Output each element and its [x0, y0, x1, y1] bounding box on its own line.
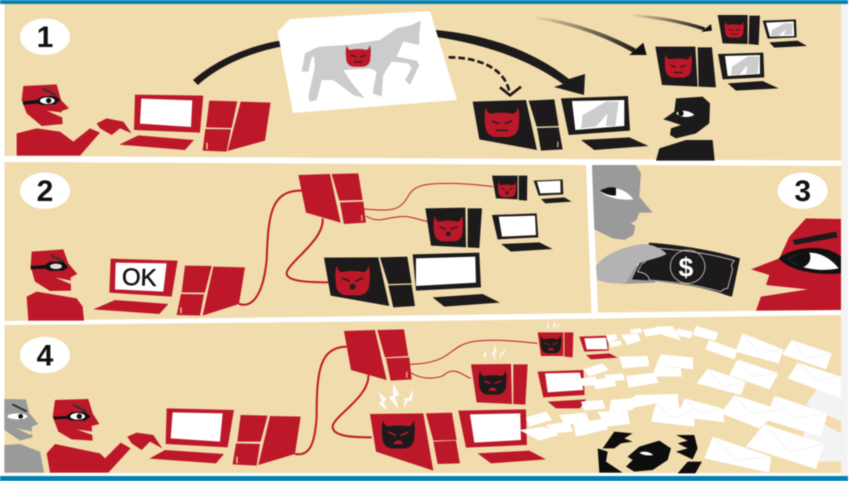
hacker computer	[119, 95, 271, 152]
hacker	[27, 249, 84, 321]
command server	[298, 173, 366, 224]
spreading arrow mid	[533, 16, 647, 55]
spam envelopes	[519, 326, 841, 473]
attacking computer large	[370, 409, 546, 471]
hand	[596, 244, 667, 283]
dashed arrow	[449, 57, 521, 95]
horse	[302, 21, 421, 102]
top blue bar	[0, 0, 848, 4]
seller face	[751, 218, 841, 311]
bottom blue bar	[0, 476, 848, 481]
number badge 1: 1	[37, 21, 53, 54]
trojan horse document	[278, 11, 457, 113]
number badge 4	[20, 337, 70, 373]
panel 2: botnet control	[4, 162, 592, 321]
overwhelmed black figure	[598, 432, 702, 473]
lightning bolts large	[378, 383, 413, 411]
panel 4: spam attack	[4, 315, 841, 473]
faded right corner	[803, 388, 841, 462]
network cables	[239, 183, 493, 305]
computer with OK screen	[93, 259, 245, 316]
victim computer small	[718, 15, 807, 48]
number badge 3	[778, 172, 828, 209]
number badge 2: 2	[37, 175, 53, 208]
zombie computer medium	[425, 208, 553, 252]
black figure	[656, 97, 715, 161]
network cables	[295, 340, 538, 454]
dollar bill	[632, 243, 740, 297]
zombie computer large	[324, 253, 500, 307]
number badge 3: 3	[794, 175, 811, 208]
hacker	[17, 84, 132, 156]
victim computer medium	[655, 47, 779, 91]
gray client figure	[4, 399, 44, 473]
curved arrow to victims	[193, 30, 585, 95]
hand shadow	[623, 263, 656, 284]
spreading arrow upper	[629, 14, 712, 32]
hacker	[47, 399, 162, 473]
attacking computer medium	[471, 344, 586, 408]
number badge 2	[20, 172, 70, 209]
attacking computer small	[538, 321, 618, 359]
number badge 1	[20, 18, 70, 55]
command server	[344, 329, 412, 381]
devil on horse	[346, 45, 371, 67]
zombie computer small	[492, 176, 572, 203]
dollar sign: $	[679, 252, 694, 282]
panel 3: selling access	[592, 165, 841, 312]
OK text: OK	[121, 264, 157, 292]
hacker computer	[149, 408, 301, 466]
panel 1: infection	[4, 4, 841, 161]
number badge 4: 4	[37, 340, 54, 372]
victim computer large	[473, 96, 649, 151]
buyer face	[592, 165, 653, 240]
